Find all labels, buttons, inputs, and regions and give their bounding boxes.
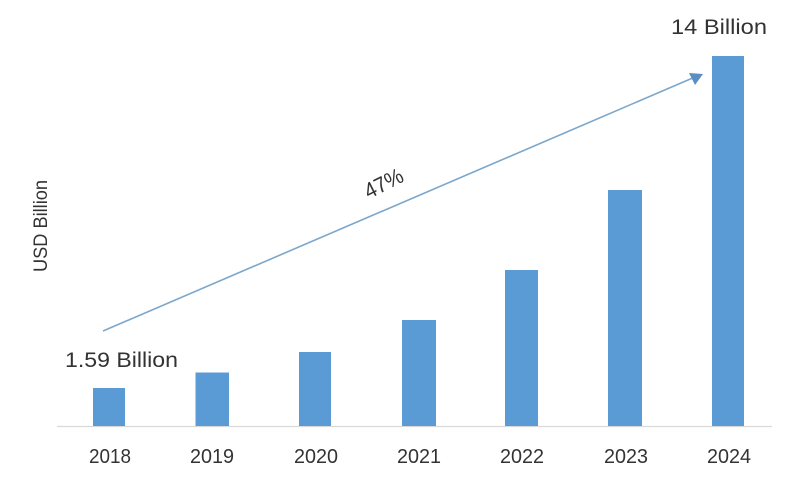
label 2022: 2022 [500,446,544,468]
year labels [89,446,751,468]
label 2024: 2024 [707,446,751,468]
label 2023: 2023 [604,446,648,468]
bar 2020 [299,352,331,426]
bar 2022 [505,270,538,426]
end value label: 14 Billion [671,15,767,39]
label 2020: 2020 [294,446,338,468]
label 2018: 2018 [89,446,131,468]
growth arrow [103,73,703,331]
label 2019: 2019 [190,446,234,468]
growth percentage: 47% [360,163,408,204]
label 2021: 2021 [397,446,441,468]
start value label: 1.59 Billion [65,348,178,372]
bar 2024 [712,56,744,426]
bar 2021 [402,320,436,426]
bars [93,56,744,426]
bar 2023 [608,190,642,426]
y axis title: USD Billion [31,180,52,272]
bar 2019 [196,372,229,426]
bar 2018 [93,388,125,426]
